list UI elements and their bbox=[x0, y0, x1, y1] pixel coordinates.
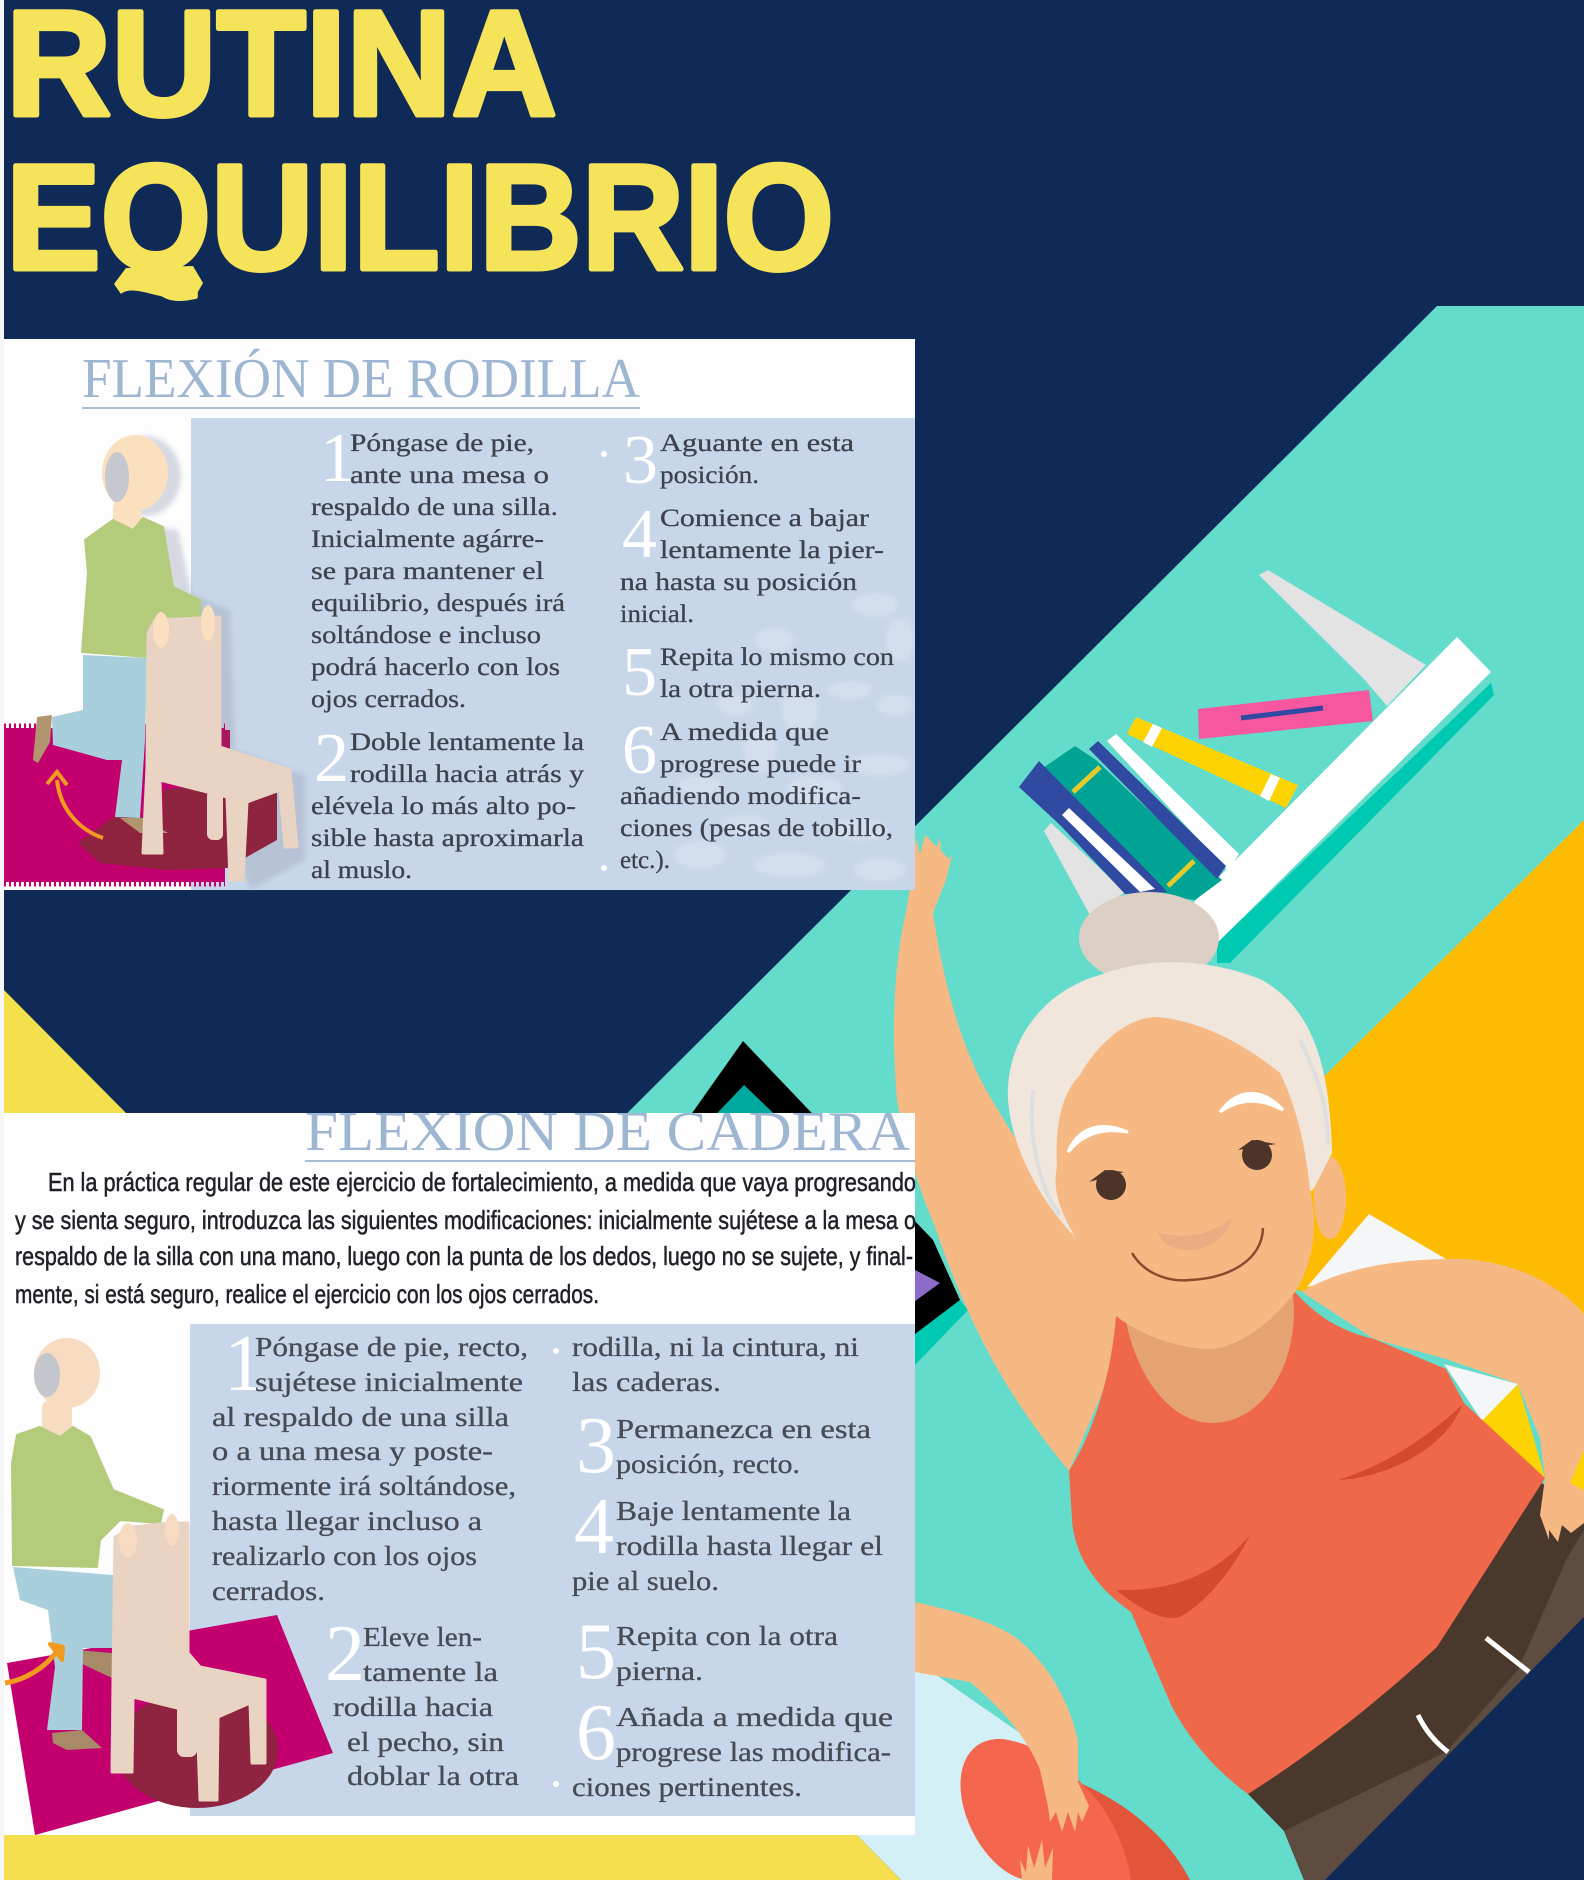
arrow bbox=[5, 1650, 58, 1683]
instructions column 2 bbox=[620, 430, 895, 874]
figure: man with chair bbox=[4, 435, 305, 890]
step numbers: 6 bbox=[622, 712, 657, 789]
instructions column 2: progrese las modifica- bbox=[616, 1737, 891, 1767]
raised arm bbox=[894, 835, 1130, 1471]
instructions column 2: Comience a bajar bbox=[660, 505, 870, 532]
instructions column 2: posición. bbox=[660, 462, 759, 489]
decorative black diamond bbox=[560, 1041, 968, 1500]
instructions column 2: lentamente la pier- bbox=[660, 537, 884, 564]
legs bbox=[13, 1567, 115, 1730]
face bbox=[1056, 1017, 1314, 1349]
instructions column 2: pie al suelo. bbox=[572, 1566, 719, 1596]
step numbers: 3 bbox=[576, 1402, 616, 1490]
instructions column 1: se para mantener el bbox=[311, 558, 544, 585]
step numbers: 2 bbox=[325, 1610, 365, 1698]
panel: flexion de rodilla bbox=[4, 339, 915, 890]
instructions column 1: realizarlo con los ojos bbox=[212, 1541, 477, 1571]
illustration: woman bbox=[894, 835, 1584, 1880]
instructions column 1: riormente irá soltándose, bbox=[212, 1471, 516, 1501]
instructions column 1: rodilla hacia bbox=[333, 1692, 493, 1722]
instructions column 2: Repita con la otra bbox=[616, 1621, 838, 1651]
head bbox=[102, 435, 168, 511]
instructions column 1 bbox=[212, 1332, 528, 1791]
bent foot bbox=[33, 715, 52, 763]
instructions column 1: sible hasta aproximarla bbox=[311, 825, 584, 852]
instructions column 1: podrá hacerlo con los bbox=[311, 654, 560, 681]
instructions column 2: Aguante en esta bbox=[660, 430, 854, 457]
instructions column 2: progrese puede ir bbox=[660, 751, 862, 778]
chair bbox=[207, 790, 223, 840]
instructions column 1: o a una mesa y poste- bbox=[212, 1436, 493, 1466]
panel: flexion de cadera bbox=[4, 1100, 916, 1835]
hair bbox=[1008, 962, 1332, 1237]
legs bbox=[52, 655, 147, 818]
step numbers: 1 bbox=[320, 420, 355, 497]
instructions column 2: inicial. bbox=[620, 601, 694, 628]
instructions column 1: ojos cerrados. bbox=[311, 686, 466, 713]
instructions column 1: al respaldo de una silla bbox=[212, 1402, 509, 1432]
instructions column 2: posición, recto. bbox=[616, 1449, 800, 1479]
step numbers: 4 bbox=[574, 1483, 614, 1571]
instructions column 2: añadiendo modifica- bbox=[620, 783, 861, 810]
right arm bbox=[1302, 1259, 1584, 1542]
step numbers: 2 bbox=[314, 720, 349, 797]
heading: FLEXIÓN DE RODILLA bbox=[82, 347, 641, 410]
instructions column 2: na hasta su posición bbox=[620, 569, 858, 596]
chair bbox=[177, 1705, 197, 1757]
instructions column 1: Eleve len- bbox=[363, 1622, 482, 1652]
neck bbox=[1125, 1295, 1294, 1423]
bun bbox=[1079, 892, 1219, 984]
hands bbox=[153, 612, 169, 648]
instructions column 1: Póngase de pie, recto, bbox=[255, 1332, 528, 1362]
sweater bbox=[12, 1427, 163, 1567]
illustration: shelf and books bbox=[1019, 570, 1494, 963]
left arm bbox=[915, 1602, 1089, 1832]
lower hand bbox=[1020, 1840, 1053, 1880]
hair strands bbox=[1032, 1040, 1328, 1215]
step numbers: 3 bbox=[623, 422, 658, 499]
white and yellow shapes behind woman bbox=[1307, 1214, 1545, 1478]
instructions column 2: Repita lo mismo con bbox=[660, 644, 895, 671]
instructions column 1: Inicialmente agárre- bbox=[311, 526, 544, 553]
instructions column 1: el pecho, sin bbox=[347, 1727, 505, 1757]
instructions column 1: doblar la otra bbox=[347, 1761, 519, 1791]
instructions column 2: las caderas. bbox=[572, 1367, 721, 1397]
instructions column 2: Permanezca en esta bbox=[616, 1414, 871, 1444]
arrow bbox=[57, 780, 103, 838]
yellow book corner bbox=[1570, 1450, 1584, 1490]
instructions column 2: ciones (pesas de tobillo, bbox=[620, 815, 893, 842]
heading: FLEXIÓN DE CADERA bbox=[305, 1100, 911, 1163]
title: EQUILIBRIO bbox=[6, 133, 834, 301]
dark floor shadow bbox=[116, 1692, 278, 1808]
neck bbox=[42, 1400, 72, 1436]
nose bbox=[1158, 1217, 1232, 1250]
instructions column 1 bbox=[311, 430, 585, 884]
instructions column 1: tamente la bbox=[363, 1657, 498, 1687]
plant watermark bbox=[674, 593, 914, 882]
hands bbox=[119, 1523, 137, 1557]
instructions column 1: Doble lentamente la bbox=[350, 729, 584, 756]
instructions column 2: Añada a medida que bbox=[616, 1702, 893, 1732]
intro paragraph: mente, si está seguro, realice el ejercicio con los ojos cerrados. bbox=[15, 1279, 599, 1309]
instructions column 1: hasta llegar incluso a bbox=[212, 1506, 482, 1536]
rug bbox=[4, 728, 225, 882]
dark floor shadow bbox=[78, 785, 277, 870]
rug bbox=[7, 1615, 333, 1835]
smile bbox=[1132, 1228, 1263, 1280]
intro paragraph: respaldo de la silla con una mano, luego con la punta de los dedos, luego no se sujete, y final- bbox=[15, 1241, 913, 1271]
intro paragraph: En la práctica regular de este ejercicio de fortalecimiento, a medida que vaya progresando bbox=[48, 1167, 916, 1197]
instructions column 2: A medida que bbox=[660, 719, 829, 746]
instructions column 1: cerrados. bbox=[212, 1576, 325, 1606]
instructions column 2: rodilla, ni la cintura, ni bbox=[572, 1332, 859, 1362]
eyes bbox=[1089, 1140, 1276, 1200]
eyebrows bbox=[1068, 1093, 1283, 1152]
instructions column 1: al muslo. bbox=[311, 857, 412, 884]
ear bbox=[1314, 1157, 1346, 1239]
blue text panel bbox=[191, 418, 915, 890]
tank top bbox=[1069, 1292, 1545, 1794]
pants bbox=[1248, 1483, 1584, 1880]
sweater bbox=[82, 518, 200, 657]
intro paragraph bbox=[15, 1167, 916, 1309]
step numbers: 6 bbox=[576, 1689, 616, 1777]
instructions column 2: Baje lentamente la bbox=[616, 1496, 851, 1526]
instructions column 2: pierna. bbox=[616, 1656, 703, 1686]
step numbers: 5 bbox=[576, 1608, 616, 1696]
instructions column 2: ciones pertinentes. bbox=[572, 1772, 802, 1802]
step numbers bbox=[224, 1320, 616, 1777]
instructions column 1: sujétese inicialmente bbox=[255, 1367, 523, 1397]
step numbers: 5 bbox=[622, 634, 657, 711]
instructions column 1: soltándose e incluso bbox=[311, 622, 541, 649]
instructions column 2: la otra pierna. bbox=[660, 676, 821, 703]
bent foot bbox=[77, 1650, 112, 1678]
instructions column 1: Póngase de pie, bbox=[350, 430, 534, 457]
step numbers: 4 bbox=[622, 496, 657, 573]
step numbers: 1 bbox=[224, 1320, 264, 1408]
intro paragraph: y se sienta seguro, introduzca las siguientes modificaciones: inicialmente sujétese a la mesa o bbox=[15, 1205, 916, 1235]
instructions column 1: elévela lo más alto po- bbox=[311, 793, 576, 820]
soft shadows bbox=[111, 436, 305, 890]
instructions column 2: rodilla hasta llegar el bbox=[616, 1531, 883, 1561]
instructions column 2 bbox=[572, 1332, 893, 1802]
step numbers bbox=[314, 420, 658, 797]
instructions column 1: rodilla hacia atrás y bbox=[350, 761, 585, 788]
ball bbox=[961, 1739, 1190, 1880]
instructions column 1: equilibrio, después irá bbox=[311, 590, 565, 617]
raised hand bbox=[907, 836, 952, 915]
instructions column 1: ante una mesa o bbox=[350, 462, 549, 489]
figure: man with chair bbox=[5, 1338, 333, 1835]
neck bbox=[113, 500, 141, 532]
blue text panel bbox=[190, 1324, 915, 1816]
instructions column 2: etc.). bbox=[620, 847, 670, 874]
instructions column 1: respaldo de una silla. bbox=[311, 494, 558, 521]
head bbox=[34, 1338, 100, 1408]
title bbox=[6, 0, 834, 301]
